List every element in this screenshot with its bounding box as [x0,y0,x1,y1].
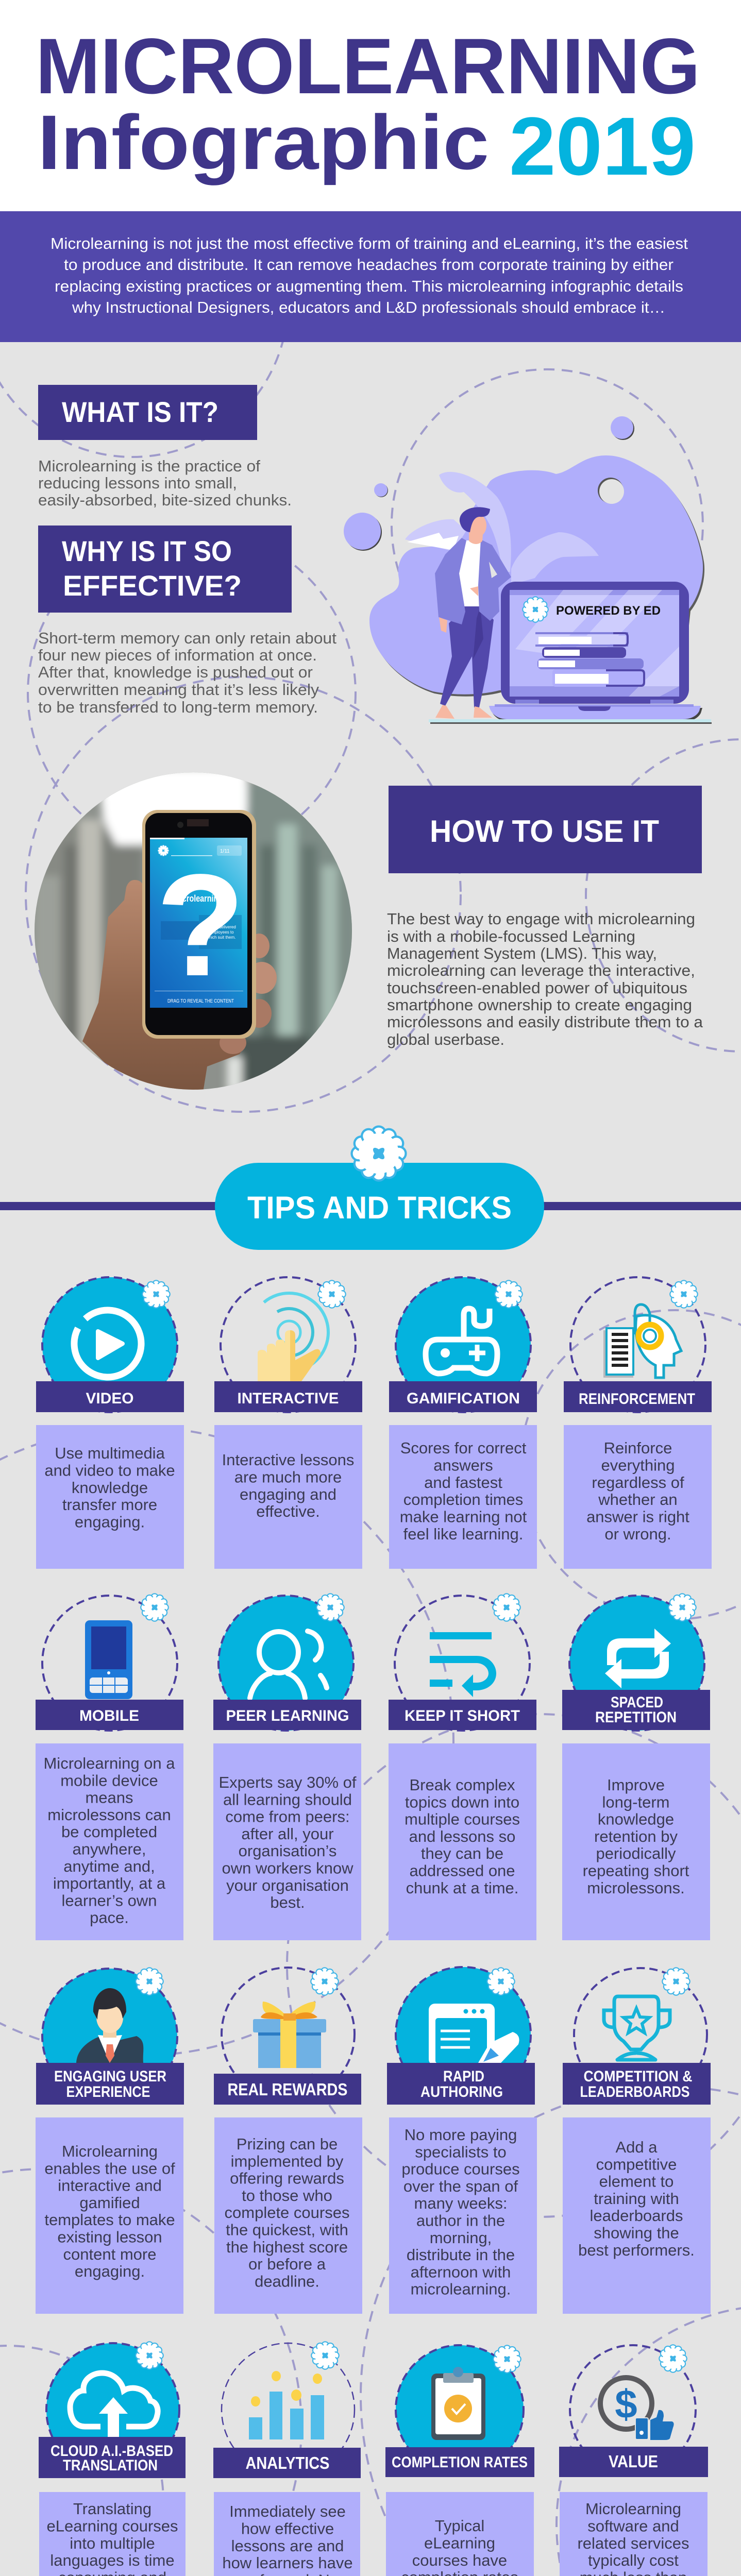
icon: dollar and thumb: $ [615,2381,637,2427]
card: analytics: Immediately see [229,2502,346,2520]
card: video [36,1277,184,1569]
icon: play [60,1296,155,1391]
card: mobile: pace. [90,1909,129,1927]
card: completion rates [385,2345,534,2576]
panel: how to use it: HOW TO USE IT [430,814,659,849]
icon: mobile phone [85,1620,132,1699]
card: real rewards: REAL REWARDS [228,2080,347,2099]
card: keep it short [389,1594,536,1940]
intro panel: Microlearning is not just the most effective form of training and eLearning, it’s the easiest [50,234,688,252]
card: mobile: Microlearning on a [43,1754,175,1772]
panel: why is it so effective [38,526,336,716]
card: reinforcement [564,1277,712,1569]
card: rapid authoring: distribute in the [407,2246,515,2264]
card: mobile: anytime and, [63,1857,155,1875]
card: peer learning: own workers know [222,1859,353,1877]
card: keep it short: Break complex [409,1776,515,1794]
phone: DRAG TO REVEAL THE CONTENT [167,998,234,1004]
card: peer learning: Experts say 30% of [218,1773,357,1791]
card: real rewards: to those who [242,2187,332,2205]
card: keep it short: they can be [421,1844,503,1862]
card: gamification: Scores for correct [400,1439,527,1457]
card: spaced repetition [562,1594,710,1940]
card: cloud translation: eLearning courses [46,2517,178,2535]
card: analytics: how learners have [222,2554,353,2572]
card: interactive [214,1277,362,1569]
card: mobile [36,1594,183,1940]
text: what is it: Microlearning is the practice of [38,457,260,475]
card: peer learning: come from peers: [225,1808,350,1826]
card: keep it short: multiple courses [405,1810,520,1828]
card: completion rates: Typical [435,2517,484,2535]
card: value: VALUE [609,2452,658,2471]
card: engaging user experience: interactive and [58,2177,162,2195]
card: keep it short: KEEP IT SHORT [405,1707,520,1724]
heading: tips and tricks [0,1127,741,1250]
card: spaced repetition: long-term [602,1793,669,1811]
title line 1: MICROLEARNING [36,22,700,110]
card: analytics: ANALYTICS [245,2453,330,2472]
panel: why is it so effective: EFFECTIVE? [63,569,242,602]
card: keep it short: and lessons so [409,1827,515,1845]
card: reinforcement: whether an [598,1490,678,1509]
card: real rewards: offering rewards [230,2170,344,2188]
icon: repeat arrows [605,1629,671,1688]
text: what is it: easily-absorbed, bite-sized chunks. [38,491,292,509]
icon: head with book [603,1304,681,1378]
panel: how to use it [387,786,703,1048]
intro panel: to produce and distribute. It can remove headaches from corporate training by either [64,256,673,274]
icon: cloud upload [70,2373,158,2437]
card: real rewards: Prizing can be [237,2135,338,2153]
card: interactive: are much more [234,1468,342,1486]
card: gamification [389,1277,537,1569]
intro panel [0,211,741,342]
card: engaging user experience: ENGAGING USER [54,2068,166,2085]
card: peer learning: PEER LEARNING [226,1707,349,1724]
text: why: Short-term memory can only retain about [38,629,336,647]
card: spaced repetition: retention by [594,1827,678,1845]
books [535,632,645,687]
card: keep it short: addressed one [409,1862,515,1879]
card: gamification: GAMIFICATION [407,1390,520,1407]
card: video: VIDEO [86,1390,134,1407]
text: why: four new pieces of information at once. [38,646,317,664]
card: analytics [213,2342,361,2576]
card: gamification: and fastest [424,1473,502,1492]
card: completion rates: COMPLETION RATES [392,2454,528,2471]
panel: what is it [38,385,292,509]
card: rapid authoring [387,1967,537,2314]
card: rapid authoring: morning, [430,2229,492,2247]
card: spaced repetition: repeating short [583,1862,689,1879]
card: gamification: feel like learning. [403,1525,523,1543]
icon: business person [76,1988,143,2063]
card: interactive: Interactive lessons [222,1451,354,1469]
label: powered by ed: POWERED BY ED [556,604,661,618]
phone: lessons delivered [204,925,236,929]
icon: controller [426,1309,497,1374]
card: real rewards: implemented by [231,2152,344,2170]
card: mobile: importantly, at a [53,1874,166,1892]
text: how to use it: The best way to engage with microlearning [387,910,695,928]
card: engaging user experience: Microlearning [62,2142,158,2160]
card: competition and leaderboards: training with [594,2190,679,2208]
card: video: transfer more [62,1496,157,1514]
card: analytics: how effective [241,2519,334,2537]
card: real rewards: the highest score [226,2238,348,2256]
card: reinforcement: or wrong. [604,1525,671,1543]
text: how to use it: Management System (LMS). This way, [387,944,657,962]
card: cloud translation: into multiple [70,2534,155,2552]
card: rapid authoring: produce courses [401,2160,520,2178]
text: how to use it: global userbase. [387,1030,504,1048]
title year: 2019 [509,100,696,192]
card: keep it short: chunk at a time. [406,1879,518,1897]
card: interactive: effective. [256,1502,320,1520]
card: spaced repetition: periodically [596,1844,676,1862]
text: how to use it [387,910,703,1048]
intro panel: replacing existing practices or augmenting them. This microlearning infographic details [55,277,683,295]
text: how to use it: is with a mobile-focussed Learning [387,927,635,945]
intro panel: why Instructional Designers, educators and L&D professionals should embrace it… [72,298,665,316]
card: completion rates: courses have [412,2551,507,2569]
title line 2: Infographic [38,99,489,185]
text: how to use it: microlearning can leverage the interactive, [387,961,695,979]
card: engaging user experience: content more [63,2245,156,2263]
text: how to use it: touchscreen-enabled power of ubiquitous [387,979,687,997]
card: engaging user experience: engaging. [75,2262,145,2280]
card: real rewards: deadline. [255,2272,319,2290]
icon: text wrap [430,1632,496,1697]
card: value: related services [577,2534,689,2552]
card: engaging user experience: gamified [79,2194,140,2212]
hand [82,880,277,1092]
icon: trophy [604,1996,670,2060]
card: spaced repetition: Improve [607,1776,665,1794]
card: video: engaging. [75,1513,145,1531]
photo: hand holding phone [34,768,356,1092]
card: spaced repetition: microlessons. [587,1879,685,1897]
card: competition and leaderboards [563,1968,711,2314]
card: competition and leaderboards: best performers. [578,2241,695,2259]
card: peer learning: your organisation [226,1876,349,1894]
card: reinforcement: Reinforce [604,1439,672,1457]
card: video: Use multimedia [55,1444,165,1462]
text: why: After that, knowledge is pushed out or [38,663,313,681]
card: rapid authoring: RAPID [443,2068,484,2085]
card: real rewards: the quickest, with [226,2221,348,2239]
panel: what is it: WHAT IS IT? [62,396,218,428]
card: competition and leaderboards: COMPETITION & [583,2068,693,2085]
icon: people [250,1631,327,1698]
card: rapid authoring: microlearning. [411,2280,511,2298]
icon: clipboard [431,2367,485,2440]
card: interactive: engaging and [240,1485,336,1503]
card: mobile: anywhere, [72,1840,146,1858]
illustration: person with laptop [344,416,712,724]
card: completion rates: eLearning [424,2534,495,2552]
card: mobile: learner’s own [62,1891,157,1909]
icon: touch hand [234,1277,344,1387]
card: engaging user experience: existing lesson [57,2228,162,2246]
card: rapid authoring: No more paying [405,2126,517,2144]
panel: why is it so effective: WHY IS IT SO [62,535,232,567]
card: peer learning [213,1594,361,1940]
card: spaced repetition: REPETITION [595,1709,677,1726]
card: competition and leaderboards: leaderboards [590,2207,683,2225]
card: reinforcement: answer is right [586,1508,689,1526]
phone: which suit them. [206,935,235,940]
card: competition and leaderboards: competitive [596,2155,677,2173]
card: competition and leaderboards: Add a [615,2138,658,2156]
phone: 1/11 [220,849,230,854]
phone: employees to [209,930,234,935]
card: mobile: be completed [61,1823,157,1841]
text: how to use it: microlessons and easily distribute them to a [387,1013,703,1031]
card: reinforcement: REINFORCEMENT [579,1391,695,1408]
card: reinforcement: regardless of [592,1473,684,1492]
card: keep it short: topics down into [405,1793,519,1811]
card: cloud translation [39,2342,186,2576]
icon: dollar and thumb [600,2378,674,2440]
card: gamification: answers [433,1456,493,1474]
card: real rewards [214,1968,362,2314]
card: peer learning: organisation’s [239,1842,336,1860]
card: gamification: make learning not [400,1508,527,1526]
card: spaced repetition: SPACED [611,1694,663,1711]
card: competition and leaderboards: element to [599,2173,673,2191]
card: gamification: completion times [403,1490,523,1509]
card: mobile: microlessons can [47,1806,171,1824]
card: peer learning: all learning should [223,1790,352,1808]
icon: document and pencil [429,2004,519,2065]
card: competition and leaderboards: LEADERBOARDS [580,2083,689,2100]
icon: powered by ed flower [523,597,548,622]
card: spaced repetition: knowledge [598,1810,674,1828]
card: value: Microlearning [585,2500,681,2518]
card: engaging user experience: EXPERIENCE [66,2083,150,2100]
card: interactive: INTERACTIVE [237,1390,339,1407]
phone: Microlearning [174,893,223,904]
text: why [38,629,336,716]
card: rapid authoring: many weeks: [414,2194,507,2212]
card: rapid authoring: over the span of [403,2177,518,2195]
card: peer learning: after all, your [241,1825,334,1843]
question mark: ? [156,844,245,1006]
card: mobile: mobile device [60,1771,158,1789]
card: engaging user experience: templates to make [44,2211,175,2229]
card: cloud translation: TRANSLATION [63,2457,158,2474]
card: cloud translation: CLOUD A.I.-BASED [50,2443,173,2460]
card: value: typically cost [588,2551,679,2569]
text: what is it [38,457,292,509]
card: mobile: MOBILE [79,1707,139,1724]
card: cloud translation: languages is time [50,2551,175,2569]
card: value [559,2345,708,2576]
heading: tips and tricks: TIPS AND TRICKS [247,1190,512,1225]
text: what is it: reducing lessons into small, [38,474,237,492]
text: why: overwritten meaning that it’s less likely [38,681,319,699]
icon: bar chart [249,2371,324,2439]
card: value: software and [587,2517,679,2535]
text: how to use it: smartphone ownership to create engaging [387,996,692,1014]
card: real rewards: complete courses [225,2204,349,2222]
card: mobile: means [85,1789,133,1807]
text: why: to be transferred to long-term memory. [38,698,318,716]
card: rapid authoring: AUTHORING [420,2083,503,2100]
icon: gift [253,2002,326,2068]
card: competition and leaderboards: showing the [594,2224,679,2242]
card: cloud translation: Translating [73,2500,151,2518]
card: real rewards: or before a [248,2255,326,2273]
card: peer learning: best. [270,1893,305,1911]
card: video: knowledge [72,1479,148,1497]
card: rapid authoring: author in the [416,2211,505,2230]
card: video: and video to make [44,1461,175,1479]
phone [142,810,256,1039]
card: engaging user experience [36,1968,184,2314]
card: reinforcement: everything [601,1456,675,1474]
card: rapid authoring: specialists to [415,2143,507,2161]
header panel with title [0,0,741,211]
card: analytics: lessons are and [231,2537,344,2555]
card: rapid authoring: afternoon with [411,2263,511,2281]
card: engaging user experience: enables the use of [44,2159,175,2177]
